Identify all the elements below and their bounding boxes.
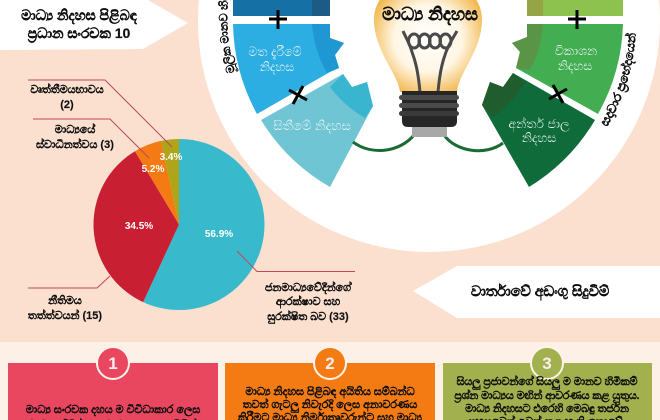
- sector: thought freedom: [261, 74, 373, 187]
- panel 3: සියලු ප්‍රජාවන්ගේ සියලු ම මානව හිමිකම්: [456, 374, 638, 391]
- bottom band: [0, 342, 660, 420]
- panel 1: [8, 347, 218, 420]
- pie label: journalist safety: සුරක්ෂිත බව (33): [267, 309, 349, 324]
- panel 1: මාධ්‍ය සංරචක දහය ම විවිධාකාර ලෙස: [26, 403, 200, 418]
- panel 3: ප්‍රශ්න මාධ්‍යය මඟින් ආවරණය කළ යුතුය.: [454, 388, 640, 404]
- arrow banner: report events: වාර්තාවේ අඩංගු සිදුවීම්: [471, 283, 609, 301]
- pie label: journalist safety: ජනමාධ්‍යවේදීන්ගේ: [265, 280, 353, 295]
- sector: opinion freedom: [233, 24, 344, 114]
- sector: internet freedom: අන්තර් ජාල: [508, 116, 570, 132]
- arrow banner: components heading: [0, 0, 188, 50]
- pie label: legal: නීතිමය: [47, 294, 82, 307]
- panel 2: මාධ්‍ය නිදහස පිළිබඳ අයිතිය සම්බන්ධ: [245, 384, 415, 400]
- pie chart: 34.5%: [125, 221, 153, 232]
- pie label: legal: තත්ත්වයන් (15): [28, 308, 102, 322]
- sector: internet freedom: නිදහස: [522, 131, 556, 146]
- big white circle: [198, 0, 660, 252]
- pie label: journalist safety: ආරක්ෂාව සහ: [276, 294, 340, 309]
- leader lines: [28, 80, 355, 288]
- sector: thought freedom: සිතීමේ නිදහස: [273, 118, 351, 134]
- curved label right: සදාචාර ප්‍රභේදයෙන්: [602, 33, 636, 126]
- panel 3: මාධ්‍ය නිදහසට එරෙහි මෙබඳු තර්ජන: [465, 401, 629, 416]
- sector: broadcast freedom: විකාශන: [555, 44, 598, 58]
- sector: light green top: [527, 0, 623, 16]
- sector: opinion freedom: මත දැරීමේ: [248, 44, 302, 60]
- icon: light bulb: [353, 0, 503, 151]
- pie label: independence: ස්වාධීනත්වය (3): [36, 137, 114, 151]
- sector: broadcast freedom: [512, 24, 623, 114]
- panel 2: 2: [325, 354, 335, 373]
- panel 2: [225, 347, 435, 420]
- pie chart: 5.2%: [142, 164, 165, 175]
- pie chart: [94, 139, 264, 310]
- arrow banner: components heading: ප්‍රධාන සංරචක 10: [27, 25, 131, 44]
- pie label: independence: [36, 122, 114, 151]
- sector: internet freedom: [482, 73, 595, 187]
- pie label: professionalism: (2): [60, 99, 74, 111]
- pie label: professionalism: [30, 82, 104, 111]
- bulb label: මාධ්‍ය නිදහස: [382, 4, 478, 26]
- panel 1: 1: [108, 354, 118, 373]
- pie label: journalist safety: [265, 280, 353, 324]
- plus signs: [269, 10, 586, 104]
- panel 3: [443, 347, 652, 420]
- panel 3: 3: [542, 354, 552, 373]
- pie label: independence: මාධ්‍යයේ: [55, 122, 96, 136]
- arrow banner: report events: [413, 266, 660, 318]
- arrow banner: components heading: මාධ්‍ය නිදහස පිළිබඳ: [21, 7, 138, 25]
- sector: broadcast freedom: නිදහස: [558, 59, 592, 74]
- sector: dark blue top: [233, 0, 330, 16]
- pie label: legal: [28, 294, 102, 322]
- pie chart: 56.9%: [205, 229, 233, 240]
- sector: opinion freedom: නිදහස: [260, 60, 294, 75]
- pie label: professionalism: වෘත්තීමයභාවය: [30, 82, 104, 96]
- pie chart: 3.4%: [160, 152, 183, 163]
- panel 2: තවත් ගැටලු නිවැරදි ලෙස අනාවරණය: [243, 397, 417, 414]
